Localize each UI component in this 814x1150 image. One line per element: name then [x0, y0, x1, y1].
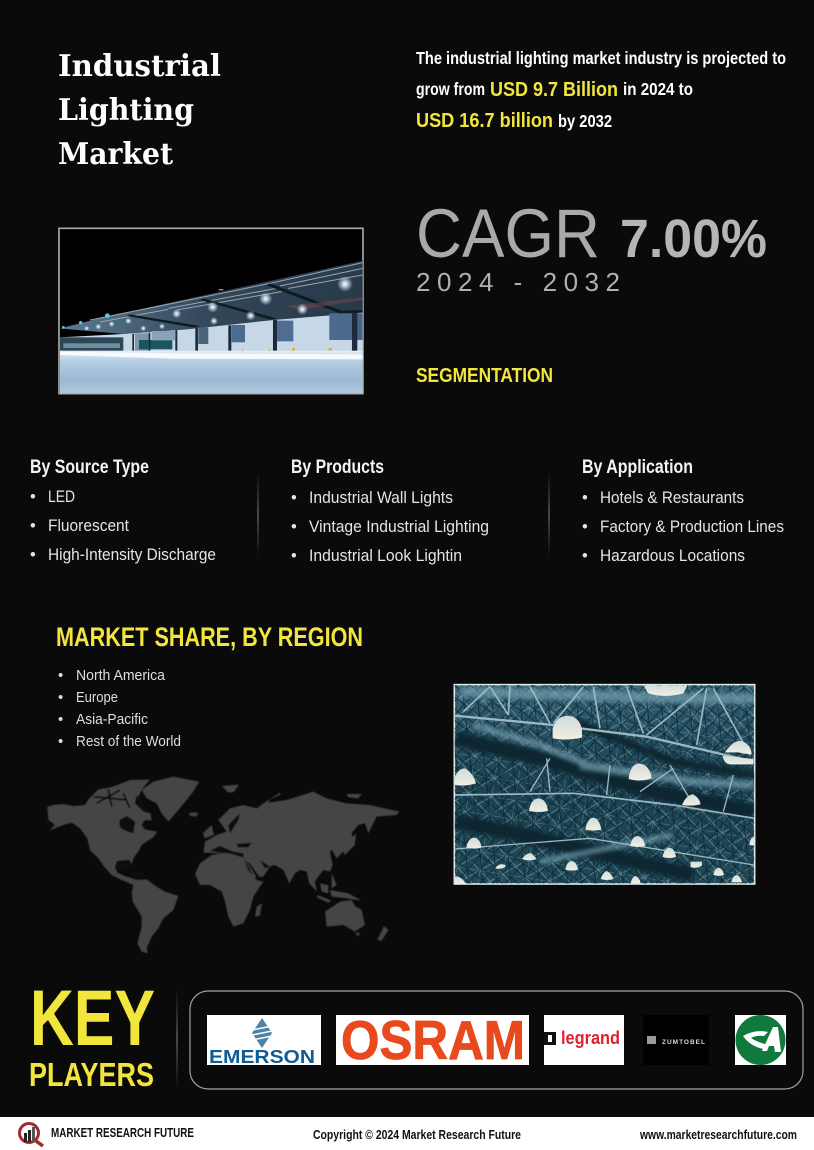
market projection text: in 2024 to: [623, 79, 693, 99]
region list: •: [58, 667, 63, 684]
key players logo panel: [190, 991, 803, 1089]
heading: market share by region: MARKET SHARE, BY REGION: [56, 622, 363, 652]
world map: [47, 777, 399, 953]
segment column: by application: •: [582, 547, 588, 565]
segment column: by source type: By Source Type: [30, 457, 149, 478]
logo: Emerson: [207, 1015, 321, 1067]
CAGR figure: [416, 195, 767, 297]
market projection text: USD 9.7 Billion: [490, 78, 618, 101]
logo: Legrand: legrand: [561, 1028, 620, 1048]
segment column: by source type: Fluorescent: [48, 517, 129, 535]
logo: Emerson: EMERSON: [209, 1047, 315, 1067]
segment column: by application: Factory & Production Lines: [600, 518, 784, 536]
segment column: by products: •: [291, 547, 297, 565]
segment column: by products: Industrial Wall Lights: [309, 489, 453, 507]
title: [58, 49, 221, 172]
CAGR figure: 2024 - 2032: [416, 267, 620, 297]
segment column: by source type: High-Intensity Discharge: [48, 546, 216, 564]
segment column: by application: By Application: [582, 457, 693, 478]
heading: segmentation: SEGMENTATION: [416, 365, 553, 387]
photo: high-bay lamps under steel trusses: [454, 685, 755, 884]
title: Industrial: [58, 49, 221, 84]
region list: •: [58, 711, 63, 728]
segment column: by source type: LED: [48, 488, 75, 506]
segment column: by source type: [30, 457, 216, 564]
market projection text: by 2032: [558, 111, 612, 131]
segment column: by products: •: [291, 489, 297, 507]
region list: •: [58, 733, 63, 750]
market projection text: USD 16.7 billion: [416, 109, 553, 132]
segment column: by application: •: [582, 518, 588, 536]
heading: key players: [29, 973, 155, 1093]
logo: Osram: OSRAM: [341, 1009, 525, 1071]
region list: [58, 667, 181, 750]
segment column: by products: •: [291, 518, 297, 536]
footer brand name: MARKET RESEARCH FUTURE: [51, 1126, 194, 1140]
market projection text: grow from: [416, 79, 485, 99]
footer copyright: Copyright © 2024 Market Research Future: [313, 1128, 521, 1142]
segment column: by source type: •: [30, 488, 36, 506]
logo: CSA: [735, 1015, 786, 1065]
segment column: by application: [582, 457, 784, 565]
icon: magnifier with bar chart logo: [20, 1124, 43, 1146]
region list: •: [58, 689, 63, 706]
region list: Asia-Pacific: [76, 711, 148, 728]
photo: illuminated warehouse canopy at night: [59, 228, 363, 394]
segment column: by products: [291, 457, 489, 565]
region list: Europe: [76, 689, 118, 706]
logo: Zumtobel: [643, 1015, 709, 1065]
segment column: by products: Vintage Industrial Lighting: [309, 518, 489, 536]
CAGR figure: CAGR: [416, 195, 600, 272]
region list: Rest of the World: [76, 733, 181, 750]
heading: key players: KEY: [30, 973, 155, 1062]
heading: key players: PLAYERS: [29, 1056, 154, 1093]
market projection text: [416, 48, 786, 132]
segment column: by source type: •: [30, 546, 36, 564]
title: Market: [58, 137, 173, 172]
footer bar: [0, 1117, 814, 1150]
logo: Zumtobel: ZUMTOBEL: [662, 1039, 705, 1046]
CAGR figure: 7.00%: [620, 209, 767, 269]
segment column: by application: Hazardous Locations: [600, 547, 745, 565]
logo: Legrand: [544, 1015, 624, 1065]
segment column: by application: •: [582, 489, 588, 507]
segment column: by source type: •: [30, 517, 36, 535]
segment column: by products: Industrial Look Lightin: [309, 547, 462, 565]
segment column: by products: By Products: [291, 457, 384, 478]
segment column: by application: Hotels & Restaurants: [600, 489, 744, 507]
region list: North America: [76, 667, 166, 684]
title: Lighting: [58, 93, 194, 128]
